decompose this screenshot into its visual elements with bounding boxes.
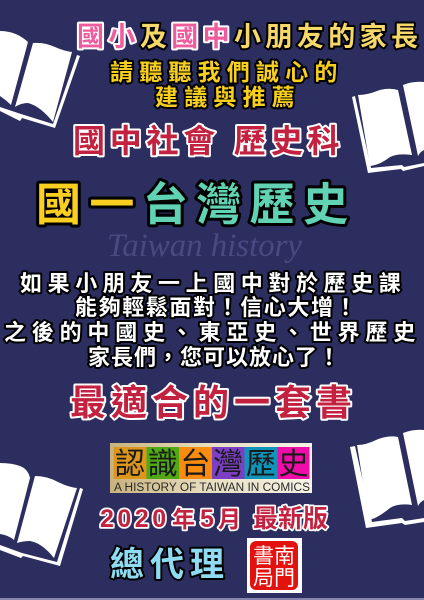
- edition date: 年: [172, 506, 195, 532]
- logo: publisher seal: [247, 538, 302, 593]
- icon: open book top left: [0, 31, 80, 128]
- icon: open book top right: [352, 82, 424, 173]
- text block: message to parents: 之後的中國史、東亞史、世界歷史: [4, 320, 421, 345]
- label: general agent: 總代理: [110, 546, 230, 584]
- heading: advice line two: 建議與推薦: [155, 84, 301, 110]
- script subtitle: Taiwan history: [107, 228, 302, 264]
- logo: A History of Taiwan in Comics: [110, 443, 312, 494]
- heading: subject: 國中社會 歷史科: [73, 123, 344, 159]
- logo: A History of Taiwan in Comics: A HISTORY OF TAIWAN IN COMICS: [114, 482, 310, 494]
- logo: A History of Taiwan in Comics: 認識台灣歷史: [115, 448, 311, 481]
- title: grade one Taiwan history: 國一台灣歷史: [36, 179, 356, 230]
- text block: message to parents: [4, 271, 421, 370]
- icon: open book bottom left: [0, 463, 83, 566]
- edition date: 2020: [100, 505, 170, 533]
- edition date: 5: [200, 505, 214, 533]
- heading: best set: 最適合的一套書: [70, 382, 357, 423]
- logo: publisher seal: 書南: [253, 545, 295, 568]
- logo: publisher seal: 局門: [253, 567, 295, 590]
- edition date: 月: [218, 506, 241, 532]
- text block: message to parents: 如果小朋友一上國中對於歷史課: [20, 271, 406, 296]
- text block: message to parents: 家長們，您可以放心了！: [88, 345, 341, 370]
- text block: message to parents: 能夠輕鬆面對！信心大增！: [75, 295, 358, 320]
- heading: advice line one: 請聽聽我們誠心的: [110, 59, 344, 85]
- heading: parents line: 國小及國中小朋友的家長: [77, 22, 422, 52]
- icon: open book bottom right: [350, 430, 424, 528]
- edition date: 最新版: [253, 505, 328, 533]
